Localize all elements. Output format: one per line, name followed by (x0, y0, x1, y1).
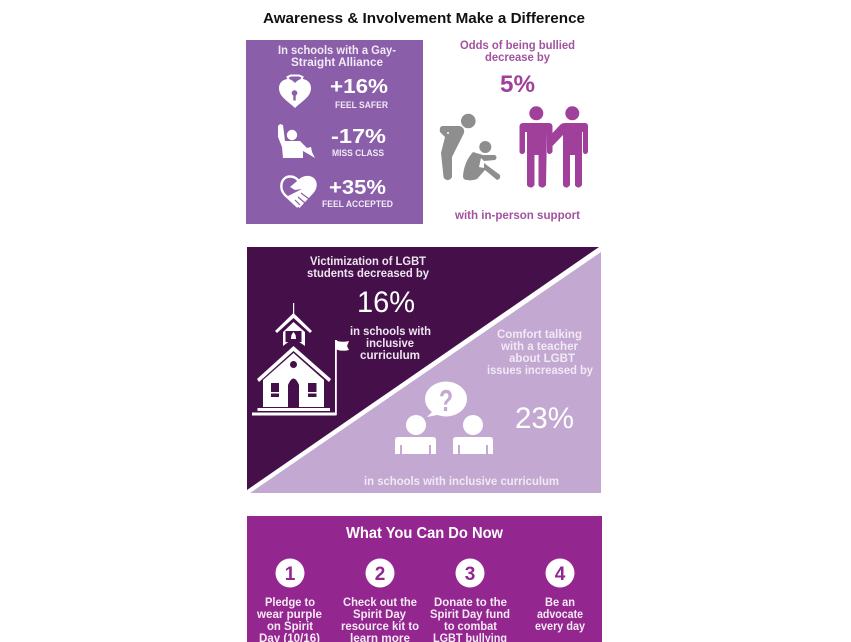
comfort heading: Comfort talking (497, 329, 582, 341)
stat: feel safer: FEEL SAFER (335, 100, 388, 110)
step 2: resource kit to (341, 621, 419, 633)
victimization heading: students decreased by (307, 268, 430, 280)
icon: raised hand student (278, 124, 315, 158)
step 4: Be an (545, 597, 575, 609)
stat: 16 percent: 16% (357, 286, 415, 319)
comfort caption: in schools with inclusive curriculum (364, 476, 559, 488)
step 3 (430, 558, 510, 642)
victimization heading: Victimization of LGBT (310, 256, 426, 268)
icon: conversation with question (395, 382, 493, 454)
victimization caption: inclusive (366, 338, 414, 350)
step 3: Spirit Day fund (430, 609, 510, 621)
victimization heading (307, 256, 430, 280)
support heading: Odds of being bullied (460, 40, 575, 52)
stat: miss class: -17% (331, 126, 386, 148)
step 2: Check out the (343, 597, 417, 609)
title: Awareness & Involvement Make a Difference (263, 11, 585, 27)
panel: inclusive curriculum (247, 247, 601, 493)
stat: feel accepted: FEEL ACCEPTED (322, 199, 393, 209)
step 4: advocate (537, 609, 583, 621)
stat: feel accepted: +35% (329, 177, 386, 199)
comfort heading: about LGBT (509, 353, 575, 365)
step 1: on Spirit (267, 621, 313, 633)
action heading: What You Can Do Now (346, 525, 504, 542)
victimization caption (350, 326, 431, 362)
support heading (460, 40, 575, 64)
step 3: 3 (465, 564, 475, 585)
step 1 (256, 558, 322, 642)
step 2: Spirit Day (353, 609, 407, 621)
panel heading: Straight Alliance (291, 57, 383, 69)
stat: feel safer (330, 76, 388, 110)
stat: feel accepted (322, 177, 393, 209)
stat: miss class (331, 126, 386, 158)
panel heading: In schools with a Gay- (278, 45, 396, 57)
icon: bullied figures (440, 114, 500, 180)
stat: 5 percent: 5% (500, 71, 535, 98)
comfort heading: issues increased by (487, 365, 594, 377)
step 4: 4 (555, 564, 566, 585)
panel heading (278, 45, 396, 69)
step 1: wear purple (256, 609, 322, 621)
step 4: every day (535, 621, 586, 633)
step 2 (341, 558, 419, 642)
panel: in-person support (440, 40, 588, 222)
victimization caption: curriculum (360, 350, 420, 362)
stat: feel safer: +16% (330, 76, 388, 98)
step 3: to combat (444, 621, 497, 633)
step 2: 2 (375, 564, 385, 585)
dark triangle (247, 247, 599, 490)
comfort heading (487, 329, 594, 377)
stat: 23 percent: 23% (515, 402, 574, 435)
victimization caption: in schools with (350, 326, 431, 338)
step 1: 1 (285, 564, 296, 585)
step 1: Pledge to (265, 597, 315, 609)
panel: gay-straight alliance (246, 40, 423, 224)
icon: supporting figures (520, 106, 588, 188)
icon: handshake heart (281, 176, 317, 208)
step 4 (535, 558, 586, 633)
support heading: decrease by (485, 52, 551, 64)
step 3: Donate to the (434, 597, 507, 609)
icon: schoolhouse (252, 303, 349, 416)
icon: heart lock (279, 76, 311, 108)
stat: miss class: MISS CLASS (332, 148, 384, 158)
light triangle (250, 252, 601, 493)
icon: conversation with question: ? (439, 383, 453, 418)
panel: what you can do now (247, 516, 602, 642)
comfort heading: with a teacher (500, 341, 579, 353)
support caption: with in-person support (454, 210, 580, 222)
